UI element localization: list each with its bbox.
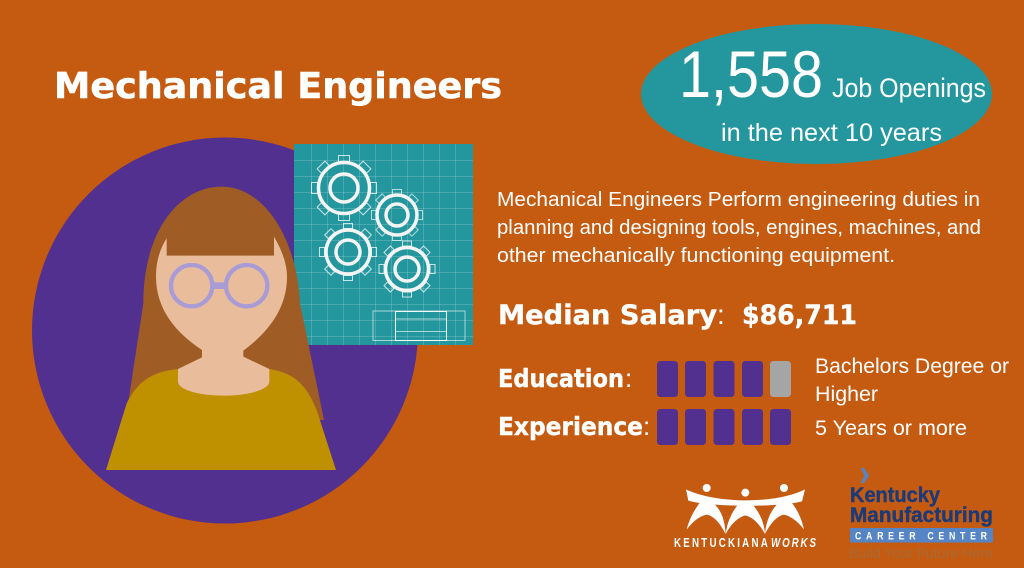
logo: KentuckianaWorks: [674, 484, 816, 550]
callout: job openings: [641, 24, 992, 164]
gear 3: [320, 224, 376, 280]
education rating bars: [657, 361, 791, 397]
gear 2: [372, 190, 422, 240]
title: Mechanical Engineers: [54, 66, 502, 107]
experience rating bars: [657, 409, 791, 445]
experience row: :: [643, 411, 650, 441]
illustration: blueprint with gears: [294, 144, 473, 345]
description text: Mechanical Engineers Perform engineering duties in: [497, 188, 980, 211]
logo: KentuckianaWorks: WORKS: [771, 537, 816, 550]
chevron icon: [860, 468, 869, 483]
shirt: [106, 369, 336, 470]
logo: Kentucky Manufacturing Career Center: Kentucky: [850, 484, 940, 507]
experience row: [498, 409, 967, 445]
logo: Kentucky Manufacturing Career Center: [849, 468, 993, 561]
median salary: $86,711: [742, 300, 857, 331]
logo mark: three linked figures: [686, 484, 805, 534]
median salary: :: [717, 299, 725, 330]
education requirement: Bachelors Degree or: [815, 354, 1009, 378]
illustration: engineer portrait: [106, 187, 336, 470]
education row: Education: [498, 364, 624, 393]
callout: job openings: Job Openings: [832, 73, 986, 103]
description text: other mechanically functioning equipment.: [497, 244, 895, 267]
logo: Kentucky Manufacturing Career Center: Manufacturing: [850, 504, 993, 527]
description text: planning and designing tools, engines, machines, and: [497, 216, 981, 239]
median salary: [498, 299, 857, 331]
education row: [498, 354, 1009, 406]
description text: [497, 188, 981, 267]
logo: Kentucky Manufacturing Career Center: CAREER CENTER: [855, 531, 987, 543]
callout: job openings: 1,558: [679, 37, 823, 111]
experience requirement: 5 Years or more: [815, 416, 967, 440]
education row: :: [625, 363, 632, 393]
glasses: [171, 265, 267, 306]
gear 4: [379, 241, 435, 297]
education requirement: [815, 354, 1009, 406]
callout: job openings: in the next 10 years: [721, 119, 942, 147]
technical drawing: [373, 311, 465, 340]
gear 1: [312, 156, 376, 220]
education requirement: Higher: [815, 382, 878, 406]
median salary: Median Salary: [498, 300, 717, 331]
illustration: purple circle backdrop: [32, 138, 418, 524]
face and neck: [156, 237, 287, 396]
logo: KentuckianaWorks: KENTUCKIANA: [674, 537, 768, 550]
logo: Kentucky Manufacturing Career Center: Build Your Future Here: [849, 545, 993, 561]
experience row: Experience: [498, 412, 643, 441]
hair: [127, 187, 324, 420]
